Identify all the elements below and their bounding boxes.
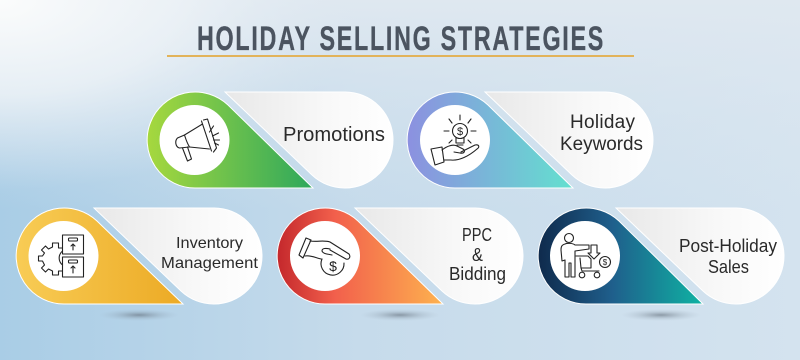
label panel: Promotions [225,92,393,188]
label: Keywords [560,134,643,155]
label [161,235,259,272]
card: PPC & Bidding [277,208,523,304]
icon circle [160,105,230,175]
icon: person with cart: $ [603,258,608,267]
icon: hand with lightbulb: $ [457,126,463,138]
label: Bidding [449,264,506,284]
card: Holiday Keywords [407,92,653,188]
icon circle [290,221,360,291]
label panel: Holiday Keywords [485,92,653,188]
label: Post-Holiday [679,236,777,256]
title underline [167,55,634,57]
teardrop: red-orange [277,208,443,304]
teardrop: navy-teal [538,208,703,304]
label: Sales [708,257,749,277]
shadows under lower cards [99,309,701,321]
label: Management [161,255,259,272]
title: HOLIDAY SELLING STRATEGIES [197,20,605,58]
icon: megaphone [176,119,220,161]
icon circle [420,105,490,175]
teardrop: amber [16,208,183,304]
label [679,236,777,277]
card: Post-Holiday Sales [538,208,784,304]
label panel: Post-Holiday Sales [616,208,784,304]
icon: hand with coin: $ [329,258,337,274]
label panel: PPC & Bidding [355,208,523,304]
label: Promotions [283,124,385,146]
card: Promotions [147,92,393,188]
label: Holiday [570,112,636,133]
icon circle [550,221,620,291]
label: PPC [462,225,492,245]
icon: person with cart [561,234,610,278]
icon: gear and boxes [38,235,84,277]
label [560,112,643,155]
label panel: Inventory Management [94,208,262,304]
icon: hand with lightbulb [431,115,479,165]
icon circle [28,221,98,291]
label [449,225,506,284]
teardrop: blue [407,92,573,188]
label: Inventory [176,235,243,252]
card: Inventory Management [16,208,262,304]
icon: hand with coin [299,238,350,275]
teardrop: green [147,92,313,188]
label: & [472,245,483,265]
